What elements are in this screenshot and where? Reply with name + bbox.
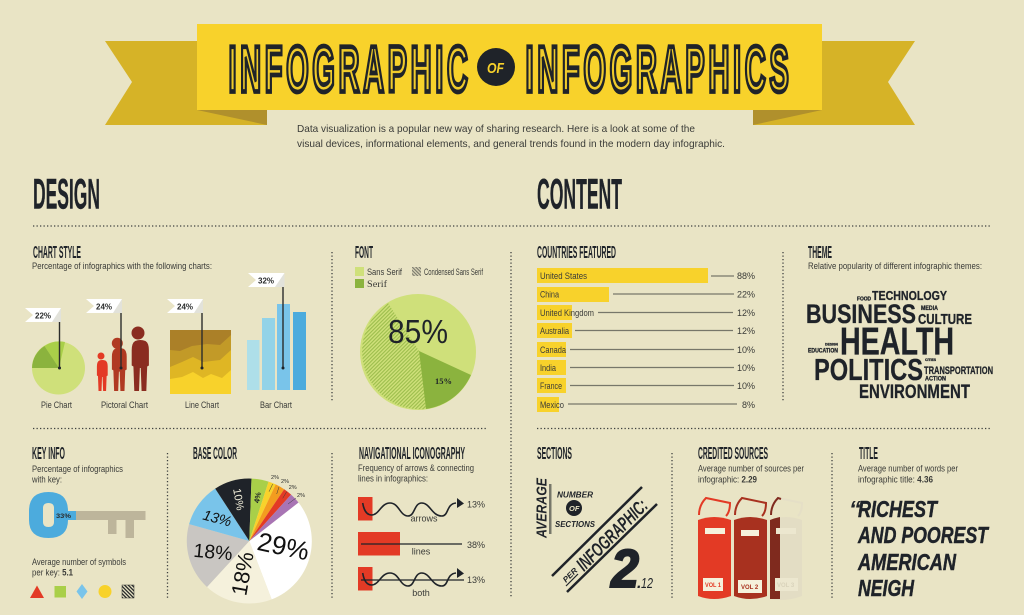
chart labels: Pictoral Chart: [101, 400, 148, 410]
banner: [105, 24, 915, 125]
lines row: lines: [412, 546, 431, 556]
font legend: Sans Serif: [367, 267, 402, 277]
country values: 12%: [737, 308, 755, 318]
intro text: Data visualization is a popular new way of sharing research. Here is a look at some of the: [297, 123, 695, 135]
key info description: Percentage of infographics: [32, 464, 123, 474]
country connector lines: [568, 276, 737, 404]
panel: key info: KEY INFO: [32, 443, 65, 463]
country names: United States: [540, 271, 587, 281]
word cloud: POLITICS: [814, 352, 923, 387]
flag 22%: [25, 308, 61, 370]
country names: United Kingdom: [540, 308, 594, 318]
word cloud: [806, 288, 993, 403]
pie chart icon: [32, 341, 85, 394]
word cloud: FOOD: [857, 296, 871, 302]
country values: 22%: [737, 290, 755, 300]
lines row: 38%: [467, 540, 485, 550]
sections typographic lockup: AVERAGE: [534, 477, 550, 539]
word cloud: ENVIRONMENT: [859, 382, 970, 403]
base color values: 4%: [252, 491, 263, 504]
example title quote: [849, 496, 989, 601]
font pie chart: 15%: [435, 376, 452, 386]
word cloud: CITIES: [925, 358, 936, 362]
word cloud: EDUCATION: [808, 348, 838, 354]
panel: credited sources: CREDITED SOURCES: [698, 443, 768, 463]
country values: 10%: [737, 363, 755, 373]
book 3: [770, 498, 802, 600]
text: NAVIGATIONAL ICONOGRAPHY: [359, 443, 465, 463]
key info description: with key:: [31, 474, 62, 484]
chart labels: Pie Chart: [41, 400, 72, 410]
both row: both: [412, 588, 430, 598]
panel: base color: [187, 443, 312, 604]
panel: chart style: CHART STYLE: [33, 242, 81, 262]
example title quote: NEIGH: [858, 575, 915, 601]
country names: Mexico: [540, 400, 564, 410]
sections typographic lockup: SECTIONS: [555, 520, 596, 529]
country names: Australia: [540, 326, 569, 336]
theme description: Relative popularity of different infographic themes:: [808, 261, 982, 271]
country names: China: [540, 290, 559, 300]
symbols description: per key: 5.1: [32, 568, 73, 578]
book 2: VOL 2: [741, 585, 759, 591]
word cloud: TECHNOLOGY: [872, 288, 947, 303]
flag 24% line: [167, 299, 204, 370]
country names: India: [540, 363, 556, 373]
book 1: VOL 1: [705, 583, 722, 589]
base color values: 13%: [201, 508, 233, 531]
flag 22%: 22%: [35, 312, 51, 320]
font pie chart: 85%: [388, 313, 448, 350]
arrows row: 13%: [467, 500, 485, 510]
line chart icon: [170, 330, 231, 394]
example title quote: AMERICAN: [857, 549, 957, 575]
base color values: 2%: [289, 485, 297, 491]
credited sources description: Average number of sources per: [698, 464, 804, 474]
country bars: [537, 268, 708, 412]
sections typographic lockup: PER: [561, 566, 580, 584]
bar chart icon: [247, 304, 306, 390]
navigation description: Frequency of arrows & connecting: [358, 463, 474, 473]
panel: title: [849, 443, 989, 601]
base color values: 2%: [297, 493, 305, 499]
panel: title: TITLE: [859, 443, 878, 463]
sections typographic lockup: INFOGRAPHIC:: [573, 496, 653, 576]
arrows row: arrows: [410, 514, 438, 524]
book 2: [734, 498, 767, 599]
arrows row: [358, 497, 485, 524]
base color values: 29%: [255, 526, 312, 566]
text: CONTENT: [537, 170, 622, 218]
panel: theme: THEME: [808, 242, 832, 262]
country values: 10%: [737, 381, 755, 391]
credited sources description: [698, 464, 804, 484]
panel: sections: [534, 443, 657, 599]
word cloud: BUSINESS: [806, 299, 916, 329]
panel: navigational iconography: [358, 443, 485, 598]
both row: [358, 567, 485, 598]
symbol icons: [30, 584, 134, 599]
font legend: [355, 267, 483, 290]
flag 32%: 32%: [258, 276, 274, 286]
symbols description: [32, 557, 126, 578]
word cloud: DESIGN: [825, 342, 838, 346]
flag 24% pictorial: [86, 299, 122, 370]
panel: countries featured: COUNTRIES FEATURED: [537, 242, 616, 262]
base color values: [193, 475, 312, 598]
panel: font: FONT: [355, 242, 373, 262]
navigation description: lines in infographics:: [358, 474, 428, 484]
sections typographic lockup: OF: [569, 504, 580, 513]
country names: Canada: [540, 345, 566, 355]
intro text: visual devices, informational elements, and general trends found in the modern day infographic.: [297, 138, 725, 150]
panel: sections: SECTIONS: [537, 443, 572, 463]
symbols description: Average number of symbols: [32, 557, 126, 567]
chart labels: Bar Chart: [260, 400, 292, 410]
pictorial chart icon: [97, 326, 149, 391]
word cloud: MEDIA: [921, 306, 939, 312]
title: INFOGRAPHIC: [228, 32, 472, 106]
base color values: 18%: [226, 550, 259, 598]
icon: key: [29, 492, 146, 538]
sections typographic lockup: 2: [610, 539, 639, 599]
text: DESIGN: [33, 170, 100, 218]
panel: chart style: [25, 242, 306, 410]
font pie chart: [360, 294, 476, 410]
country values: [737, 271, 755, 410]
panel: theme: [806, 242, 993, 403]
base color values: 10%: [230, 488, 246, 512]
chart labels: [41, 400, 292, 410]
country names: France: [540, 381, 562, 391]
base color values: 2%: [271, 475, 279, 481]
sections typographic lockup: NUMBER: [557, 490, 593, 500]
country values: 10%: [737, 345, 755, 355]
chart labels: Line Chart: [185, 400, 219, 410]
panel: base color: BASE COLOR: [193, 443, 237, 463]
credited sources description: infographic: 2.29: [698, 474, 757, 484]
example title quote: “: [849, 496, 861, 522]
word cloud: CULTURE: [918, 312, 972, 328]
word cloud: TRANSPORTATION: [924, 365, 993, 377]
sections typographic lockup: [534, 477, 657, 599]
country values: 12%: [737, 326, 755, 336]
base color values: 18%: [193, 540, 233, 565]
book 3: VOL 3: [777, 583, 795, 589]
panel: key info: [29, 443, 146, 599]
lines row: [358, 532, 485, 556]
country values: 88%: [737, 271, 755, 281]
example title quote: RICHEST: [858, 496, 938, 522]
key info description: [31, 464, 123, 484]
icon: key: 33%: [56, 513, 71, 520]
intro text: [297, 123, 725, 150]
base color pie: [187, 479, 312, 604]
base color leader lines: [269, 484, 296, 504]
title panel description: [858, 464, 958, 484]
word cloud: ACTION: [925, 376, 946, 382]
country values: 8%: [742, 400, 755, 410]
chart style description: Percentage of infographics with the following charts:: [32, 261, 212, 271]
both row: 13%: [467, 575, 485, 585]
panel: countries featured: [537, 242, 755, 412]
title panel description: Average number of words per: [858, 464, 958, 474]
font legend: Serif: [367, 279, 388, 290]
word cloud: HEALTH: [840, 320, 954, 364]
base color values: 2%: [281, 479, 289, 485]
flag 24% line: 24%: [177, 302, 193, 312]
book 1: [698, 498, 731, 599]
country names: [540, 271, 594, 410]
navigation description: [358, 463, 474, 484]
title panel description: infographic title: 4.36: [858, 474, 933, 484]
sections typographic lockup: 12: [641, 575, 653, 592]
panel: credited sources: [698, 443, 804, 600]
sections typographic lockup: .: [637, 575, 641, 592]
font legend: Condensed Sans Serif: [424, 267, 483, 277]
flag 32%: [248, 273, 284, 370]
flag 24% pictorial: 24%: [96, 302, 112, 312]
title: OF: [487, 60, 505, 77]
panel: font: [355, 242, 483, 410]
